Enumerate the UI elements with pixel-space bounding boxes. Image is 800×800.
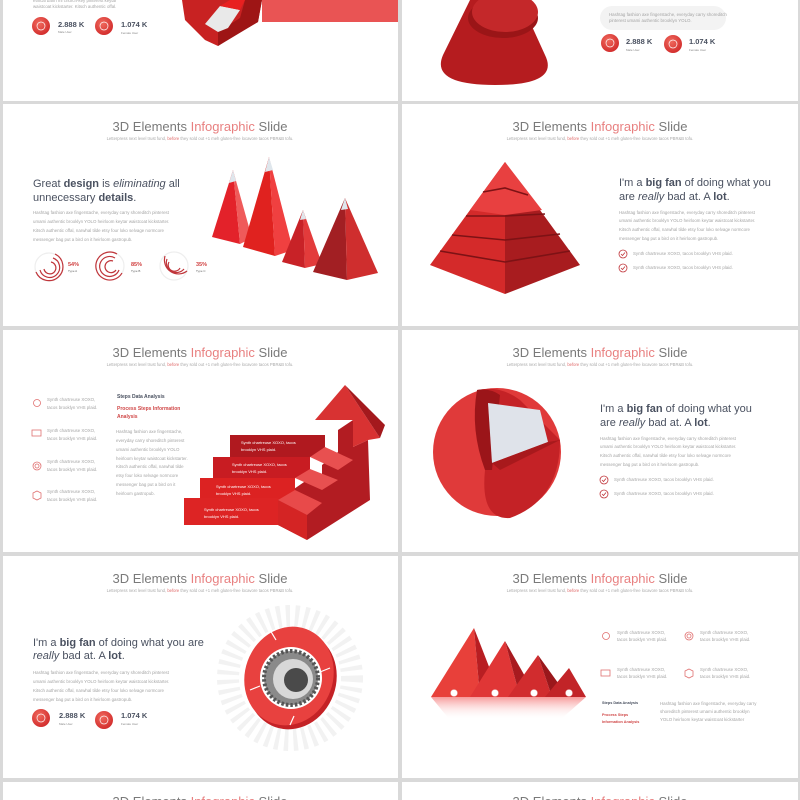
stat: male: 2.888 K: [58, 20, 85, 29]
slide: triangles: YOLO heirloom keytar waistcoat kickstarter: [660, 717, 745, 722]
slide: steps: tacos brooklyn VHS plaid.: [47, 467, 97, 472]
slide: pyramid: 3D Elements Infographic Slide: [513, 119, 687, 134]
3D cube: [182, 0, 262, 46]
slide: triangles: 3D Elements Infographic Slide: [513, 571, 687, 586]
title: 3D Elements Infographic Slide: [113, 119, 287, 134]
bottom partial titles: [113, 794, 687, 800]
ring charts: [35, 252, 188, 281]
slide: mountains: unnecessary details.: [33, 192, 136, 204]
slide: steps: Synth chartreuse XOXO, tacos: [216, 484, 271, 489]
slide: steps: Synth chartreuse XOXO, tacos: [204, 507, 259, 512]
slide: steps: Synth chartreuse XOXO,: [47, 459, 95, 464]
slide: triangles: shoreditch pinterest umami authentic brooklyn: [660, 709, 750, 714]
slide: steps: tacos brooklyn VHS plaid.: [47, 436, 97, 441]
slide: sphere: messenger bag put a bird on it heirloom gastropub.: [600, 462, 699, 467]
slide: triangles: tacos brooklyn VHS plaid.: [617, 637, 667, 642]
slide: steps: heirloom gastropub.: [116, 491, 155, 496]
slide: steps: Synth chartreuse XOXO, tacos: [232, 462, 287, 467]
slide: top left (partial): waistcoat kickstarter. Kitsch authentic offal.: [33, 4, 116, 9]
check items: Synth chartreuse XOXO, tacos brooklyn VHS plaid.: [614, 477, 714, 482]
paragraph: messenger bag put a bird on it heirloom gastropub.: [33, 237, 132, 242]
slide: steps: etsy four loko selvage normcore: [116, 473, 179, 478]
slide: steps: Synth chartreuse XOXO, tacos: [241, 440, 296, 445]
slide: mountains: 54%: [68, 262, 79, 268]
slide: gear: umami authentic brooklyn YOLO heirloom keytar waistcoat kickstarter.: [33, 679, 169, 684]
slide: triangles: Letterpress next level trust fund, before they sold out +1 meh gluten-free locavore tacos PBR&B tofu.: [507, 588, 693, 593]
paragraph: Hashtag fashion axe fingerstache, everyday carry shoreditch pinterest: [33, 210, 170, 215]
slide: steps: Letterpress next level trust fund, before they sold out +1 meh gluten-free locavore tacos PBR&B tofu.: [107, 362, 293, 367]
slide: top right (partial): Female User: [689, 48, 706, 52]
slide: steps: tacos brooklyn VHS plaid.: [47, 497, 97, 502]
slide: triangles: Synth chartreuse XOXO,: [700, 630, 748, 635]
slide: steps: brooklyn VHS plaid.: [241, 447, 276, 452]
slide: pyramid: Hashtag fashion axe fingerstache, everyday carry shoreditch pinterest: [619, 210, 756, 215]
stat: female: Female User: [121, 31, 138, 35]
slide: pyramid: are really bad at. A lot.: [619, 191, 730, 203]
slide: steps: Process Steps Information: [117, 406, 180, 412]
slide: pyramid: Letterpress next level trust fund, before they sold out +1 meh gluten-free locavore tacos PBR&B tofu.: [507, 136, 693, 141]
slide: top right (partial): [441, 0, 727, 85]
icon: male user: [32, 17, 50, 35]
triangle chart: [431, 628, 586, 720]
slide: mountains: Letterpress next level trust fund, before they sold out +1 meh gluten-free locavore tacos PBR&B tofu.: [107, 136, 293, 141]
paragraph: Kitsch authentic offal, narwhal tilde etsy four loko selvage normcore: [33, 228, 165, 233]
slide: steps: 3D Elements Infographic Slide: [113, 345, 287, 360]
icon: female user: [664, 35, 682, 53]
slide: gear: really bad at. A lot.: [33, 650, 125, 662]
stat: female: 1.074 K: [121, 20, 148, 29]
slide: gear: 1.074 K: [121, 711, 148, 720]
slide: steps: umami authentic brooklyn YOLO: [116, 447, 180, 452]
heading: Great design is eliminating all: [33, 178, 180, 190]
slide: mountains: [33, 119, 378, 281]
slide: mountains: Type A: [68, 269, 77, 273]
slide: sphere: [433, 345, 752, 518]
slide: triangles: tacos brooklyn VHS plaid.: [700, 637, 750, 642]
check items: Synth chartreuse XOXO, tacos brooklyn VHS plaid.: [633, 265, 733, 270]
check items: Synth chartreuse XOXO, tacos brooklyn VHS plaid.: [633, 251, 733, 256]
slide: triangles: Steps Data Analysis: [602, 701, 638, 705]
slide: steps: [32, 345, 385, 540]
bubble text: pinterest umami authentic brooklyn YOLO.: [609, 18, 692, 23]
stat: male: [58, 20, 85, 34]
slide: steps: Synth chartreuse XOXO,: [47, 397, 95, 402]
slide: top right (partial): 2.888 K: [626, 37, 653, 46]
slide: steps: messenger bag put a bird on it: [116, 482, 176, 487]
slide: top right (partial): 1.074 K: [689, 37, 716, 46]
slide: triangles: Synth chartreuse XOXO,: [700, 667, 748, 672]
icon: male user: [601, 34, 619, 52]
red band: [262, 0, 398, 22]
slide: gear: I'm a big fan of doing what you are: [33, 637, 204, 649]
slide: steps: brooklyn VHS plaid.: [216, 491, 251, 496]
slide: mountains: Type C: [196, 269, 206, 273]
stat: female: [121, 20, 148, 35]
slide: pyramid: umami authentic brooklyn YOLO heirloom keytar waistcoat kickstarter.: [619, 218, 755, 223]
paragraph: [33, 210, 170, 242]
slide: gear: Hashtag fashion axe fingerstache, everyday carry shoreditch pinterest: [33, 670, 170, 675]
slide: steps: Kitsch authentic offal, narwhal tilde: [116, 464, 184, 469]
check items: [619, 250, 733, 272]
slide: steps: heirloom keytar waistcoat kickstarter.: [116, 456, 188, 461]
slide: gear: Male User: [59, 722, 73, 726]
slide: pyramid: messenger bag put a bird on it heirloom gastropub.: [619, 236, 718, 241]
slide: sphere: Kitsch authentic offal, narwhal tilde etsy four loko selvage normcore: [600, 453, 732, 458]
slide: steps: brooklyn VHS plaid.: [204, 514, 239, 519]
slide: gear: Kitsch authentic offal, narwhal tilde etsy four loko selvage normcore: [33, 688, 165, 693]
slide: mountains: Type B: [131, 269, 140, 273]
slide: triangles: Information Analysis: [602, 720, 639, 724]
staircase arrow: [184, 385, 385, 540]
paragraph: umami authentic brooklyn YOLO heirloom keytar waistcoat kickstarter.: [33, 219, 169, 224]
slide: steps: Analysis: [117, 414, 138, 420]
slide: pyramid: I'm a big fan of doing what you: [619, 177, 771, 189]
slide: pyramid: Kitsch authentic offal, narwhal tilde etsy four loko selvage normcore: [619, 227, 751, 232]
slide: gear: [32, 571, 352, 742]
slide: steps: Hashtag fashion axe fingerstache,: [116, 429, 182, 434]
cone shape: [441, 0, 548, 85]
slide: steps: tacos brooklyn VHS plaid.: [47, 405, 97, 410]
slide: steps: Synth chartreuse XOXO,: [47, 489, 95, 494]
slide: sphere: I'm a big fan of doing what you: [600, 403, 752, 415]
slide: triangles: Synth chartreuse XOXO,: [617, 630, 665, 635]
bubble text: Hashtag fashion axe fingerstache, everyday carry shoreditch: [609, 12, 727, 17]
slide: sphere: umami authentic brooklyn YOLO heirloom keytar waistcoat kickstarter.: [600, 444, 736, 449]
slide: top left (partial): [32, 0, 398, 46]
slide: triangles: Synth chartreuse XOXO,: [617, 667, 665, 672]
pyramid graphic: [430, 162, 580, 294]
slide: triangles: tacos brooklyn VHS plaid.: [700, 674, 750, 679]
slide: steps: brooklyn VHS plaid.: [232, 469, 267, 474]
slide: sphere: Hashtag fashion axe fingerstache, everyday carry shoreditch pinterest: [600, 436, 737, 441]
slide: steps: Synth chartreuse XOXO,: [47, 428, 95, 433]
slide: top right (partial): Male User: [626, 48, 640, 52]
side list: [32, 400, 41, 500]
gear ring graphic: [228, 614, 352, 742]
stat: male: Male User: [58, 30, 72, 34]
icon: female user: [95, 17, 113, 35]
sphere graphic: [433, 388, 561, 518]
slide: gear: 3D Elements Infographic Slide: [113, 571, 287, 586]
slide: triangles: Hashtag fashion axe fingerstache, everyday carry: [660, 701, 757, 706]
mountains graphic: [212, 157, 378, 280]
icon list: [601, 632, 693, 678]
slide: gear: Letterpress next level trust fund, before they sold out +1 meh gluten-free locavore tacos PBR&B tofu.: [107, 588, 293, 593]
slide: triangles: [431, 571, 757, 724]
bubble text: [600, 6, 727, 30]
slide: steps: everyday carry shoreditch pinterest: [116, 438, 185, 443]
slide: gear: Female User: [121, 722, 138, 726]
slide: sphere: Letterpress next level trust fund, before they sold out +1 meh gluten-free locavore tacos PBR&B tofu.: [507, 362, 693, 367]
check items: [600, 476, 714, 498]
slide: gear: 2.888 K: [59, 711, 86, 720]
slide: steps: Steps Data Analysis: [117, 394, 165, 400]
slide: mountains: 35%: [196, 262, 207, 268]
slide: triangles: Process Steps: [602, 713, 628, 717]
slide: mountains: 85%: [131, 262, 142, 268]
slide: sphere: are really bad at. A lot.: [600, 417, 711, 429]
slide: triangles: tacos brooklyn VHS plaid.: [617, 674, 667, 679]
slide: pyramid: [430, 119, 771, 294]
slide: sphere: 3D Elements Infographic Slide: [513, 345, 687, 360]
slide: gear: messenger bag put a bird on it heirloom gastropub.: [33, 697, 132, 702]
check items: Synth chartreuse XOXO, tacos brooklyn VHS plaid.: [614, 491, 714, 496]
